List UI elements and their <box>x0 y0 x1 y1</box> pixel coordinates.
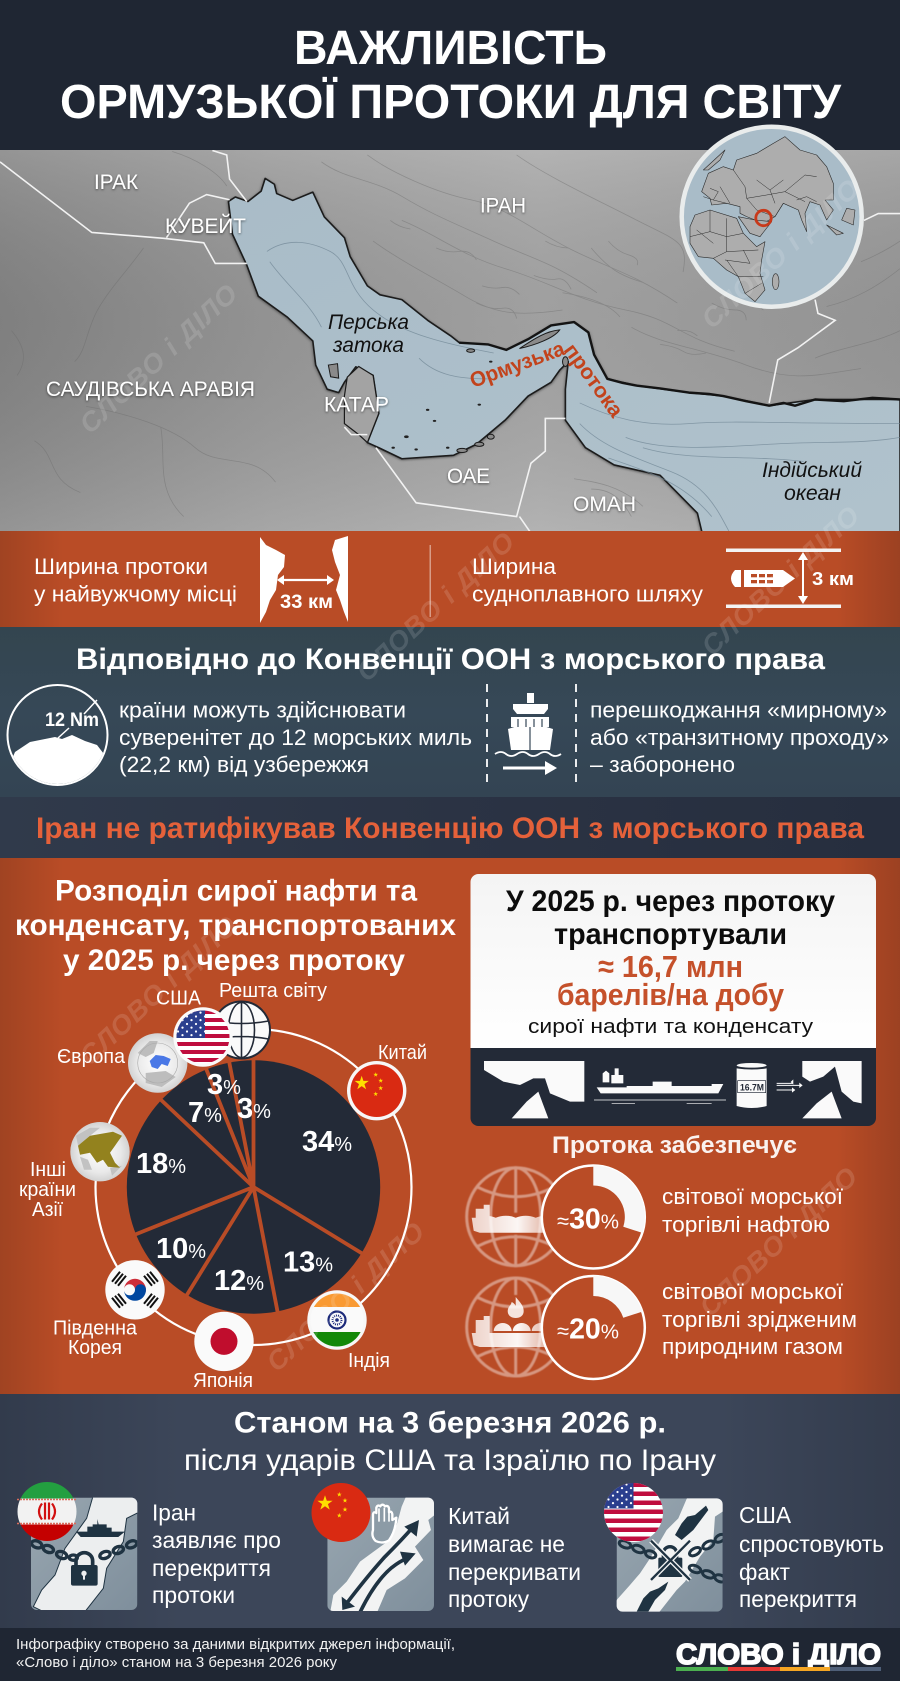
map country labels: КУВЕЙТ <box>165 214 246 238</box>
icon: 12 nautical miles: 12 Nm <box>45 710 99 731</box>
text: strait width: Ширина протоки <box>34 554 208 579</box>
stat: LNG trade 20 percent <box>467 1276 857 1379</box>
flag: USA <box>173 1007 233 1067</box>
pie values: 34% <box>302 1126 352 1158</box>
icon strip: strait, tanker, barrel <box>484 1061 862 1118</box>
map country labels: ОМАН <box>573 493 636 516</box>
text: passage prohibited: перешкоджання «мирному» <box>590 698 887 722</box>
pie values: 3% <box>237 1093 271 1125</box>
Qatar peninsula <box>344 366 379 443</box>
icon: shipping lane 3 km: 3 км <box>812 569 854 589</box>
flag: South Korea <box>105 1260 165 1320</box>
source note: Інфографіку створено за даними відкритих джерел інформації, <box>16 1636 455 1653</box>
heading: distribution: конденсату, транспортованих <box>15 909 457 942</box>
stat: LNG trade 20 percent: природним газом <box>662 1334 843 1359</box>
text: China demands: вимагає не <box>448 1531 565 1557</box>
pie labels: Азії <box>32 1198 63 1221</box>
watermarks: СЛОВО і ДІЛО <box>74 910 244 1071</box>
text: China demands: протоку <box>448 1586 529 1612</box>
text: sovereignty: країни можуть здійснювати <box>119 698 406 722</box>
pie labels: Китай <box>378 1041 427 1064</box>
pie values: 12% <box>214 1265 264 1297</box>
card: 16.7 million barrels per day <box>470 874 876 1126</box>
icon: strait with crossed-out chain and ships <box>615 1495 726 1613</box>
text: strait width <box>34 554 237 606</box>
item: USA denies closure <box>604 1482 884 1613</box>
panel: strait width <box>0 531 900 627</box>
icon: Asia globe <box>70 1122 130 1181</box>
source note <box>16 1636 455 1671</box>
source note: «Слово і діло» станом на 3 березня 2026 року <box>16 1654 337 1671</box>
flag: USA <box>604 1482 664 1542</box>
map country labels: ОАЕ <box>447 465 490 488</box>
pie labels <box>19 979 427 1392</box>
footer <box>0 1628 900 1681</box>
pie labels: США <box>156 986 201 1010</box>
card text <box>506 885 835 1038</box>
text: USA denies: спростовують <box>739 1531 884 1557</box>
strait name label <box>470 344 620 419</box>
icon: ship with arrow <box>487 684 576 786</box>
text: USA denies <box>739 1502 884 1612</box>
stat: oil trade 30 percent <box>467 1166 843 1268</box>
card text: барелів/на добу <box>557 977 785 1012</box>
text: sovereignty <box>119 698 472 777</box>
icon: rest of world globe <box>213 1002 270 1058</box>
pie labels: Японія <box>193 1369 253 1392</box>
text: sovereignty: суверенітет до 12 морських миль <box>119 725 472 750</box>
watermarks: СЛОВО і ДІЛО <box>261 1216 431 1377</box>
pie values: 3% <box>207 1069 241 1101</box>
icon: strait 33 km: 33 км <box>280 592 333 613</box>
icon: strait 33 km <box>260 536 348 623</box>
text: Iran claims: перекриття <box>152 1555 271 1581</box>
pie labels: країни <box>19 1178 76 1201</box>
text: USA denies: перекриття <box>739 1586 857 1612</box>
watermarks: СЛОВО і ДІЛО <box>696 173 866 334</box>
map of the Strait of Hormuz <box>0 150 900 537</box>
heading: strait provides: Протока забезпечує <box>552 1132 797 1159</box>
text: shipping lane width: Ширина <box>472 554 557 579</box>
text: passage prohibited <box>590 698 889 777</box>
card text: транспортували <box>554 918 787 951</box>
thick Iranian coastline <box>459 322 900 406</box>
text: USA denies: США <box>739 1502 791 1528</box>
pie values: 10% <box>156 1233 206 1265</box>
watermarks: СЛОВО і ДІЛО <box>351 526 521 687</box>
map country labels: ІРАК <box>94 171 139 194</box>
map country labels <box>46 171 636 516</box>
map country labels: ІРАН <box>480 194 526 218</box>
flag: China <box>312 1483 370 1542</box>
text: Iran claims: протоки <box>152 1582 235 1608</box>
stat: oil trade 30 percent: ≈30% <box>557 1203 619 1235</box>
flag: Iran <box>17 1482 77 1542</box>
land contour lines <box>11 152 900 517</box>
pie labels: Решта світу <box>219 979 328 1002</box>
item: Iran claims closure <box>17 1482 281 1612</box>
flag: India <box>307 1290 367 1350</box>
location marker <box>756 210 771 226</box>
watermarks: СЛОВО і ДІЛО <box>74 278 244 439</box>
text: strait width: у найвужчому місці <box>34 582 237 606</box>
panel: status as of 3 March 2026 <box>0 1394 900 1628</box>
icon: globe with gas carrier <box>467 1278 574 1376</box>
icon strip: strait, tanker, barrel: 16.7M <box>740 1083 764 1093</box>
stat: LNG trade 20 percent: торгівлі зрідженим <box>662 1307 857 1332</box>
text: China demands <box>448 1503 581 1612</box>
icon: globe with oil tanker <box>467 1168 574 1266</box>
pie values: 13% <box>283 1246 333 1278</box>
stat: oil trade 30 percent: торгівлі нафтою <box>662 1212 830 1237</box>
heading: distribution: у 2025 р. через протоку <box>63 944 406 977</box>
pie labels: Південна <box>53 1316 138 1340</box>
title <box>60 22 842 129</box>
watermarks: СЛОВО і ДІЛО <box>694 1161 864 1322</box>
text: shipping lane width <box>472 554 703 606</box>
panel: UN Convention on the Law of the Sea <box>0 627 900 797</box>
stat: oil trade 30 percent: світової морської <box>662 1184 843 1209</box>
card text: ≈ 16,7 млн <box>598 949 743 984</box>
map country labels: КАТАР <box>324 394 389 416</box>
heading <box>184 1406 716 1477</box>
strait name label: протока <box>559 339 628 422</box>
title: ОРМУЗЬКОЇ ПРОТОКИ ДЛЯ СВІТУ <box>60 76 842 129</box>
text: shipping lane width: судноплавного шляху <box>472 582 703 606</box>
text: passage prohibited: або «транзитному проходу» <box>590 725 889 750</box>
title: ВАЖЛИВІСТЬ <box>294 22 607 75</box>
heading: Станом на 3 березня 2026 р. <box>234 1406 666 1440</box>
globe inset <box>682 127 862 307</box>
map country labels: САУДІВСЬКА АРАВІЯ <box>46 378 255 401</box>
strait name label: Ормузька <box>467 337 568 393</box>
flag: Japan <box>194 1312 254 1371</box>
heading: після ударів США та Ізраїлю по Ірану <box>184 1444 716 1477</box>
water body <box>228 178 900 537</box>
heading: distribution <box>15 874 457 977</box>
text: Iran claims: Іран <box>152 1500 196 1526</box>
icon: shipping lane 3 km <box>726 548 854 608</box>
text: sovereignty: (22,2 км) від узбережжя <box>119 752 369 777</box>
sea labels: океан <box>784 482 841 505</box>
text: USA denies: факт <box>739 1559 790 1585</box>
statement: Іран не ратифікував Конвенцію ООН з морського права <box>36 812 864 845</box>
pie values: 18% <box>136 1148 186 1180</box>
card text: сирої нафти та конденсату <box>528 1015 814 1038</box>
heading: distribution: Розподіл сирої нафти та <box>55 874 418 908</box>
sea labels: Індійський <box>762 459 862 482</box>
text: China demands: перекривати <box>448 1559 581 1585</box>
header band <box>0 0 900 150</box>
watermarks: СЛОВО і ДІЛО <box>696 500 866 661</box>
pie values <box>136 1069 352 1297</box>
item: China demands no closure <box>312 1483 581 1613</box>
card text: У 2025 р. через протоку <box>506 885 835 918</box>
stat: LNG trade 20 percent: ≈20% <box>557 1314 619 1346</box>
icon: 12 nautical miles <box>5 685 110 790</box>
pie labels: Європа <box>57 1045 126 1068</box>
panel: crude oil distribution and strait share <box>0 858 900 1394</box>
logo: СЛОВО і ДІЛО <box>676 1639 881 1671</box>
text: passage prohibited: – заборонено <box>590 752 735 777</box>
text: China demands: Китай <box>448 1503 510 1529</box>
text: Iran claims <box>152 1500 281 1608</box>
pie labels: Інші <box>30 1158 66 1181</box>
pie values: 7% <box>188 1097 222 1129</box>
icon: Europe globe <box>128 1033 187 1093</box>
pie labels: Корея <box>68 1336 122 1359</box>
sea labels: Перська <box>328 311 409 334</box>
text: Iran claims: заявляє про <box>152 1527 281 1553</box>
border lines <box>0 151 900 537</box>
watermarks <box>74 173 866 1377</box>
islands in the gulf <box>328 330 568 453</box>
heading: Відповідно до Конвенції ООН з морського права <box>76 643 825 676</box>
panel: Iran did not ratify <box>0 797 900 858</box>
icon: strait with hand and arrows <box>327 1495 437 1613</box>
stat: LNG trade 20 percent: світової морської <box>662 1279 843 1304</box>
sea labels <box>328 311 862 505</box>
pie labels: Індія <box>348 1349 390 1372</box>
icon: strait with chain and lock <box>31 1495 140 1612</box>
flag: China <box>347 1061 406 1120</box>
pie chart <box>96 1029 412 1345</box>
sea contour lines <box>267 242 900 531</box>
sea labels: затока <box>332 334 404 357</box>
